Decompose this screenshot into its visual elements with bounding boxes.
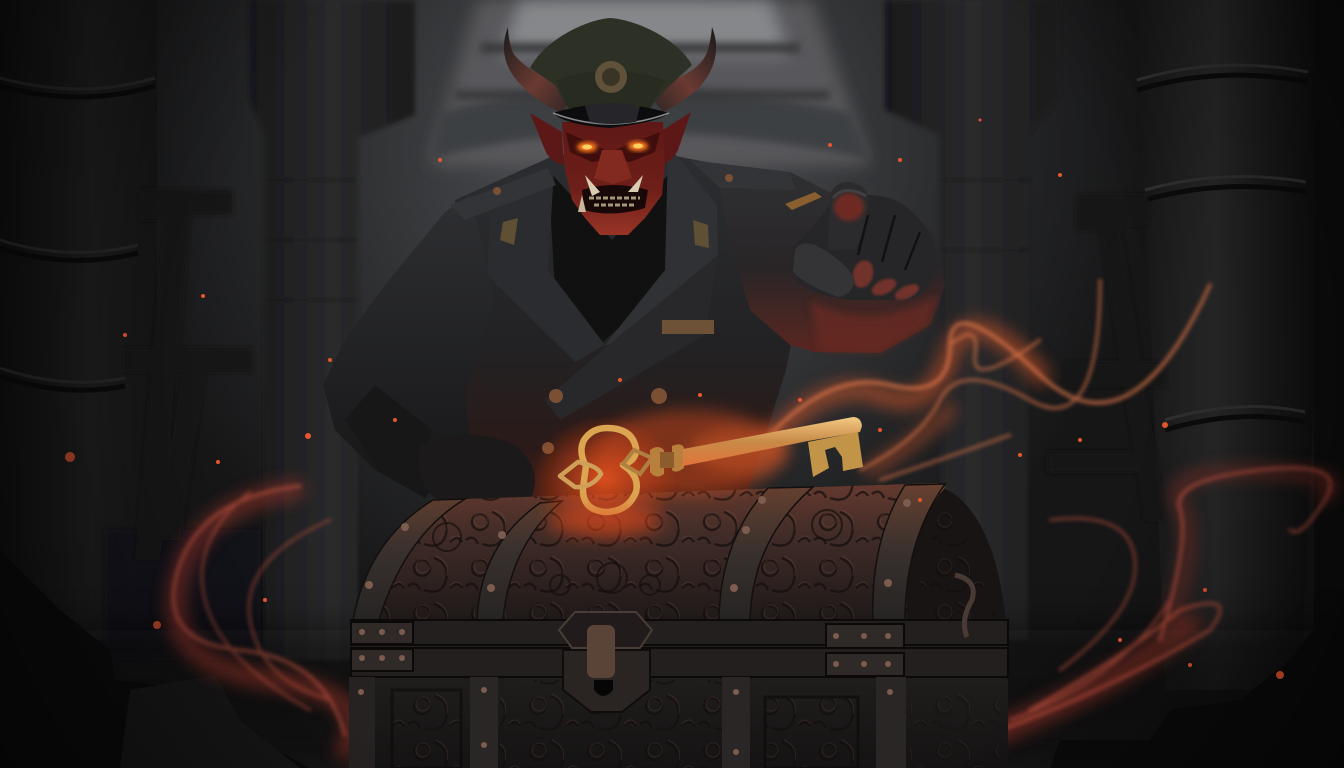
left arm	[323, 195, 495, 498]
left large column	[0, 0, 157, 640]
turtleneck	[548, 170, 672, 345]
left shoulder strap	[450, 168, 556, 220]
window: bright skylight	[430, 0, 870, 165]
right lapel	[605, 145, 718, 345]
lid straps	[353, 484, 945, 622]
nose	[594, 150, 632, 184]
hammer silhouettes	[105, 190, 1165, 660]
mouth and tusks	[582, 185, 648, 214]
glowing key	[533, 410, 863, 540]
face	[562, 122, 665, 235]
right large column	[1134, 0, 1344, 768]
left gloved hand	[419, 435, 535, 500]
rear flames left	[173, 486, 353, 750]
key bow main ring	[581, 428, 637, 512]
chest iron bands	[351, 620, 1008, 677]
horns	[504, 27, 716, 113]
floor shadow	[0, 630, 1344, 768]
key bow side loop	[560, 462, 601, 487]
right arm	[715, 165, 945, 353]
treasure chest	[349, 483, 1008, 768]
brow shadow	[566, 132, 660, 162]
officer cap	[530, 18, 692, 128]
pointing fist	[793, 182, 936, 303]
lid end cap	[907, 488, 1006, 622]
coat torso	[455, 155, 800, 500]
rivets	[358, 496, 911, 755]
right shoulder strap	[690, 160, 795, 190]
left lapel	[487, 152, 605, 362]
key bit	[808, 432, 863, 477]
curled fingers	[850, 258, 921, 303]
embers	[65, 118, 1284, 679]
left cuff	[345, 385, 432, 490]
demon officer figure	[323, 18, 945, 500]
rear flames right	[880, 468, 1332, 768]
coat buttons	[493, 174, 733, 454]
eyes	[577, 141, 648, 152]
chest lid	[353, 483, 1006, 622]
lid motif rings	[433, 510, 842, 595]
rocks bottom corners	[0, 550, 1344, 768]
side handle	[955, 575, 973, 637]
key glow	[533, 416, 677, 540]
far columns	[250, 0, 1060, 660]
lid glow below key	[547, 506, 663, 538]
collar badges	[500, 192, 822, 334]
key collar	[650, 444, 684, 477]
key bow right junction	[623, 450, 652, 474]
right arm flame trail	[765, 280, 1210, 480]
thumb	[793, 243, 855, 297]
double-breasted front	[545, 255, 718, 420]
ears	[530, 112, 691, 165]
chest body	[350, 620, 1008, 768]
index finger	[828, 182, 868, 250]
lower panels	[349, 677, 1000, 768]
cap emblem	[595, 61, 627, 93]
key shaft	[683, 417, 862, 466]
chest lock	[559, 612, 652, 712]
